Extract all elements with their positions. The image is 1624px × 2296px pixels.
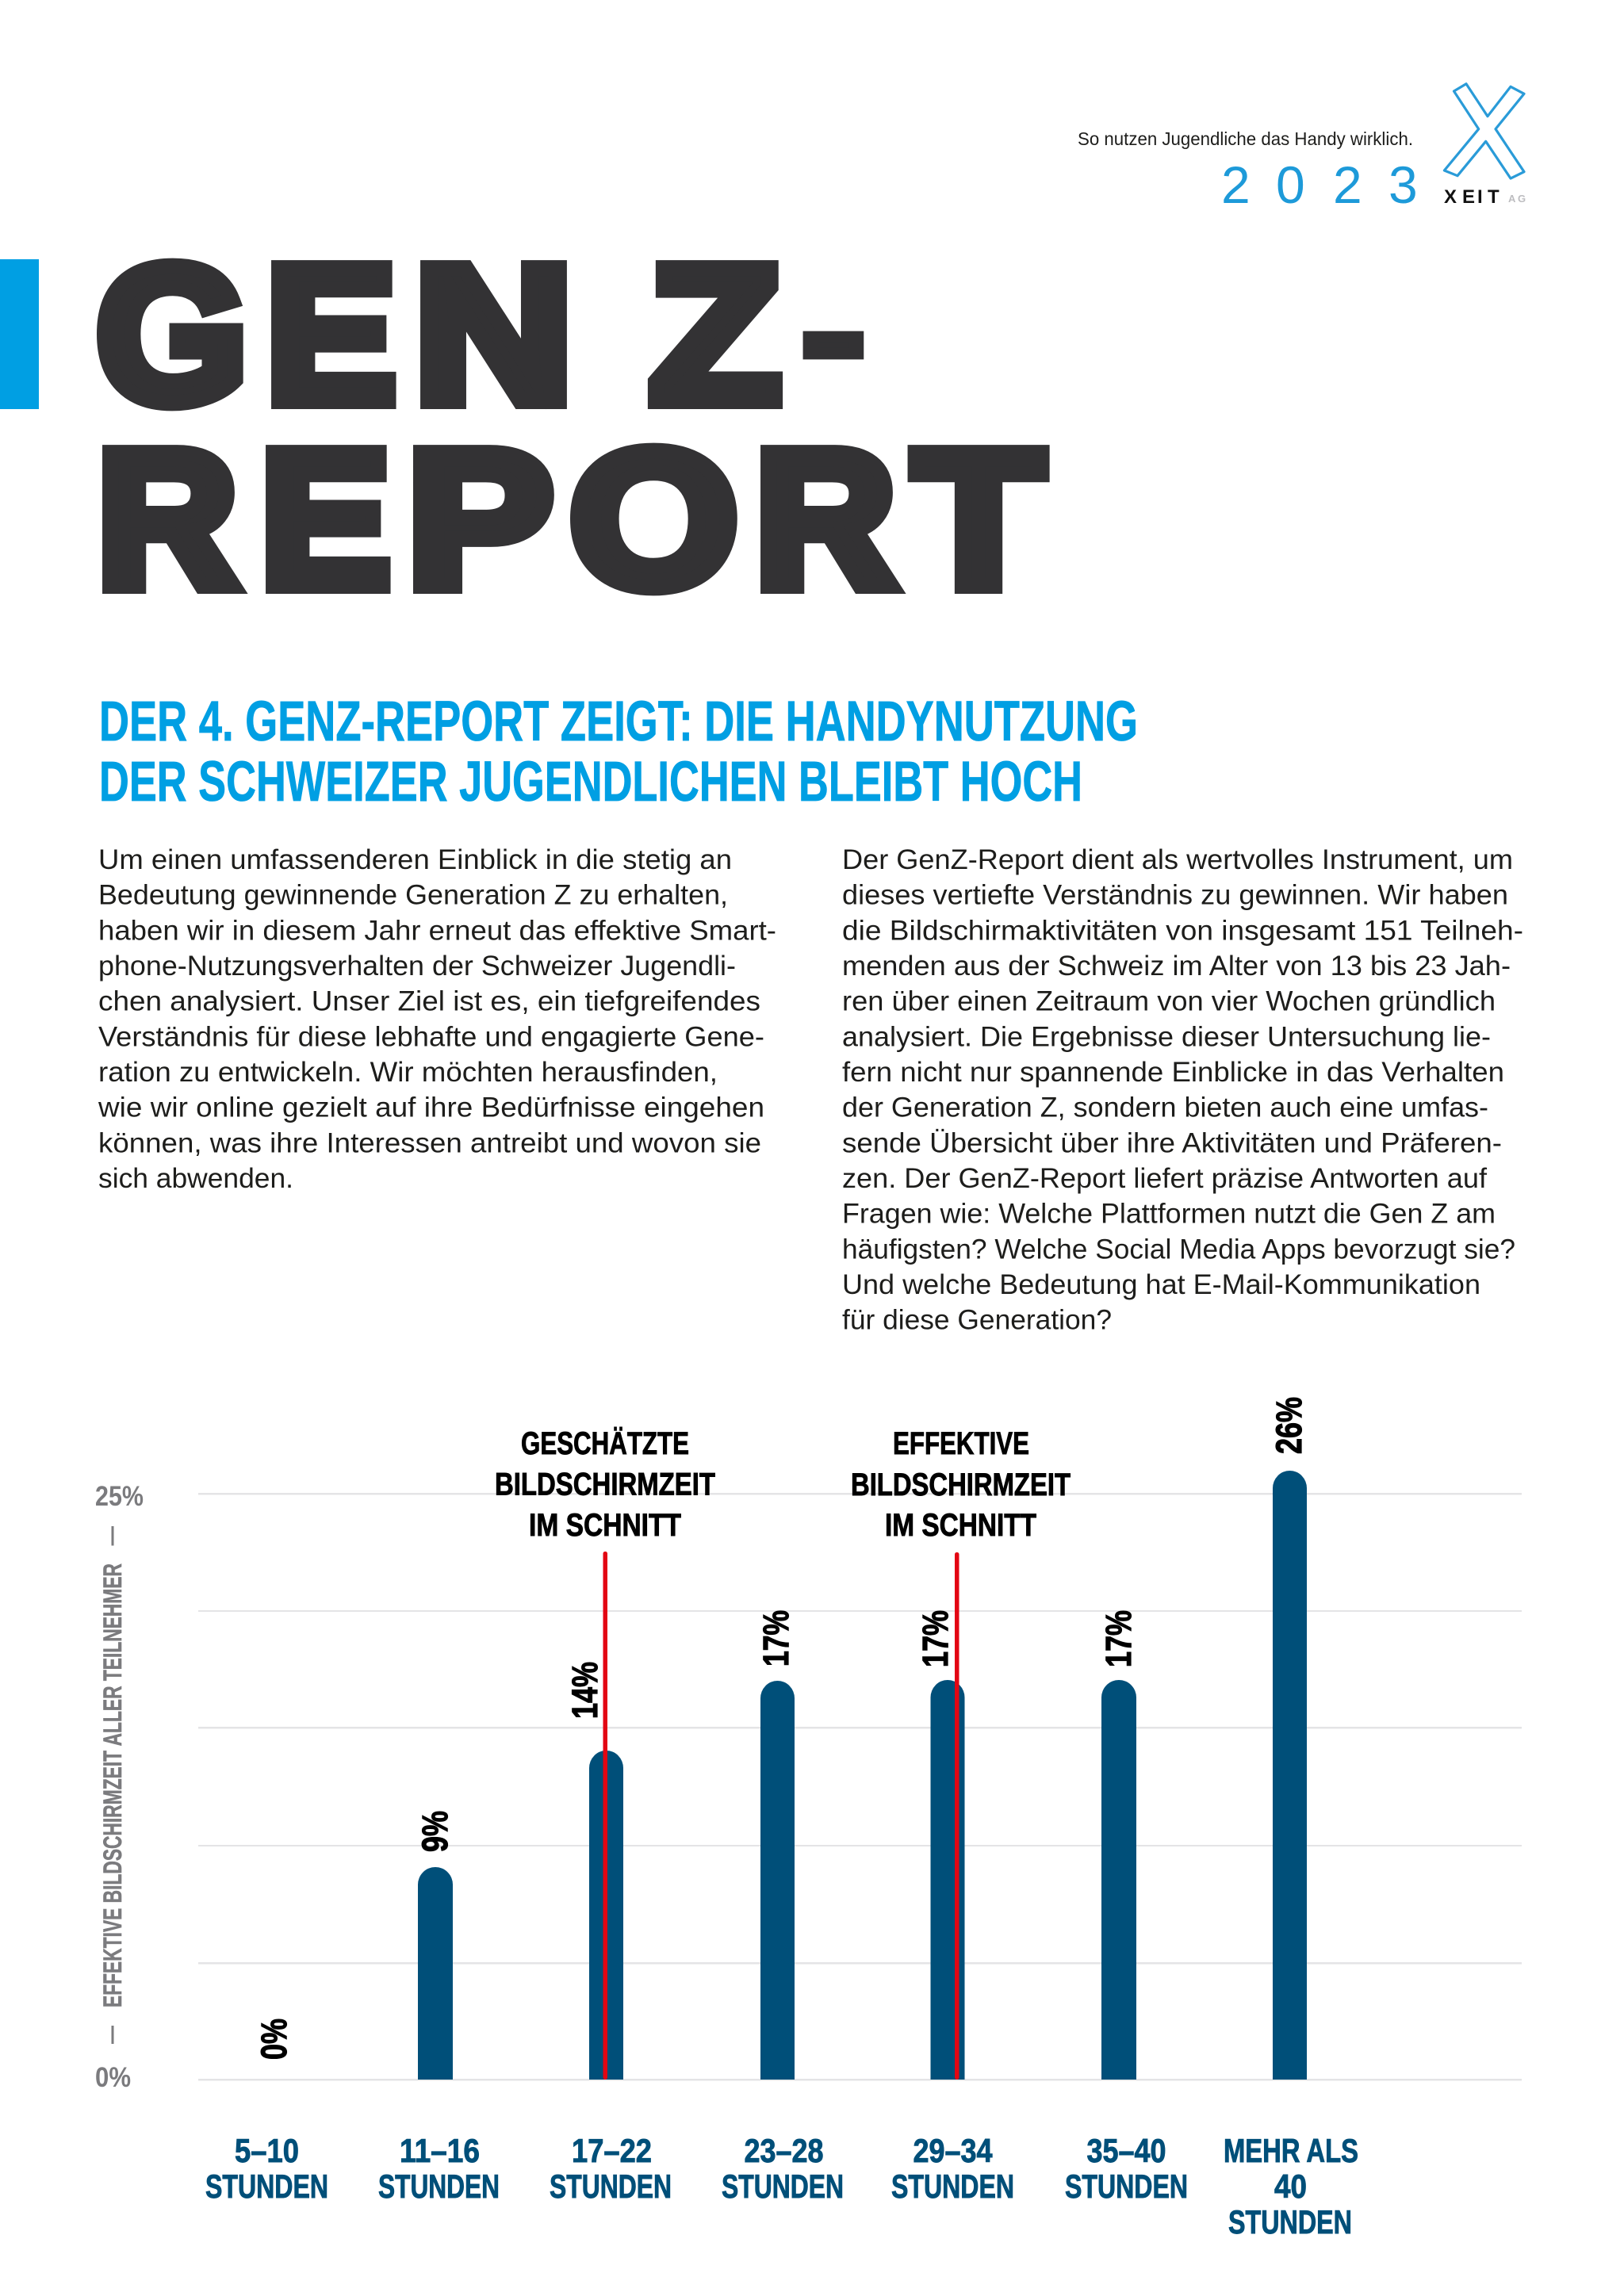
x label: 5–10 Stunden — [205, 2132, 328, 2205]
main title — [97, 226, 1044, 628]
value 0%: 0% — [254, 2019, 294, 2060]
body text: right column: der Generation Z, sondern bieten auch eine umfas- — [842, 1093, 1488, 1123]
main title: G — [97, 226, 247, 442]
body text: left column: ration zu entwickeln. Wir möchten herausfinden, — [98, 1057, 718, 1088]
bar chart: effective screen time — [95, 1397, 1522, 2241]
x label: 5–10 Stunden: 5–10 — [235, 2132, 299, 2169]
main title: R — [756, 411, 895, 627]
bar: 11–16 Stunden — [418, 1867, 453, 2080]
x label: 11–16 Stunden — [378, 2132, 500, 2205]
x label: 23–28 Stunden: 23–28 — [744, 2132, 823, 2169]
callout: estimated screen time — [495, 1426, 715, 1543]
body text: left column: haben wir in diesem Jahr erneut das effektive Smart- — [98, 915, 776, 946]
body text: left column: Bedeutung gewinnende Generation Z zu erhalten, — [98, 880, 728, 911]
body text: left column: können, was ihre Interessen antreibt und wovon sie — [98, 1127, 761, 1158]
x label: 35–40 Stunden: STUNDEN — [1065, 2168, 1188, 2205]
callout: estimated screen time: IM SCHNITT — [529, 1508, 681, 1543]
x label: 23–28 Stunden — [722, 2132, 844, 2205]
value 9%: 9% — [415, 1811, 455, 1852]
body text: left column: sich abwenden. — [98, 1163, 293, 1194]
value 17% (23–28): 17% — [756, 1610, 796, 1667]
x label: mehr als 40 Stunden: 40 — [1274, 2168, 1307, 2205]
callout: estimated screen time: BILDSCHIRMZEIT — [495, 1467, 715, 1502]
x label: 5–10 Stunden: STUNDEN — [205, 2168, 328, 2205]
subheading — [99, 691, 1138, 813]
main title: P — [408, 411, 553, 628]
value 14%: 14% — [565, 1662, 605, 1719]
y axis tick bottom — [111, 2026, 114, 2044]
callout: effective screen time: BILDSCHIRMZEIT — [851, 1468, 1071, 1502]
icon: XEIT X logo mark — [1444, 84, 1524, 178]
x label: mehr als 40 Stunden — [1224, 2132, 1358, 2241]
main title: Z — [650, 227, 780, 442]
x label: mehr als 40 Stunden: MEHR ALS — [1224, 2132, 1358, 2169]
body text: left column — [98, 844, 776, 1194]
body text: left column: chen analysiert. Unser Ziel ist es, ein tiefgreifendes — [98, 986, 760, 1017]
x label: 17–22 Stunden: 17–22 — [572, 2132, 652, 2169]
body text: right column: die Bildschirmaktivitäten von insgesamt 151 Teilneh- — [842, 915, 1523, 946]
main title: N — [415, 227, 573, 442]
x label: 29–34 Stunden: STUNDEN — [891, 2168, 1014, 2205]
marker: estimated average — [603, 1552, 607, 2080]
tagline: So nutzen Jugendliche das Handy wirklich. — [1078, 128, 1413, 149]
callout: effective screen time: IM SCHNITT — [885, 1508, 1036, 1543]
body text: right column: für diese Generation? — [842, 1305, 1112, 1336]
x label: 11–16 Stunden: 11–16 — [400, 2132, 480, 2169]
body text: right column: analysiert. Die Ergebnisse dieser Untersuchung lie- — [842, 1021, 1491, 1052]
x label: 35–40 Stunden: 35–40 — [1086, 2132, 1166, 2169]
body text: left column: Verständnis für diese lebhafte und engagierte Gene- — [98, 1021, 764, 1052]
bar: mehr als 40 Stunden — [1273, 1471, 1307, 2080]
main title: E — [261, 411, 390, 627]
marker: effective average — [955, 1552, 959, 2080]
body text: right column: Und welche Bedeutung hat E-Mail-Kommunikation — [842, 1269, 1480, 1300]
x label: mehr als 40 Stunden: STUNDEN — [1228, 2203, 1352, 2241]
y axis bottom value: 0% — [95, 2062, 131, 2093]
subheading: DER 4. GENZ-REPORT ZEIGT: DIE HANDYNUTZUNG — [99, 691, 1138, 753]
bar: 17–22 Stunden — [589, 1751, 623, 2080]
x label: 23–28 Stunden: STUNDEN — [722, 2168, 844, 2205]
value 17% (35–40): 17% — [1098, 1610, 1139, 1667]
header: tagline, year and logo — [1078, 84, 1526, 214]
y axis top value: 25% — [95, 1481, 144, 1512]
value 17% (29–34): 17% — [915, 1610, 956, 1667]
y axis tick top — [111, 1526, 114, 1546]
bar: 35–40 Stunden — [1101, 1680, 1136, 2080]
logo wordmark: XEIT — [1444, 186, 1500, 208]
value 26%: 26% — [1269, 1397, 1309, 1454]
main title: O — [570, 411, 737, 627]
body text: right column: menden aus der Schweiz im Alter von 13 bis 23 Jah- — [842, 951, 1511, 982]
x label: 11–16 Stunden: STUNDEN — [378, 2168, 500, 2205]
body text: right column — [842, 844, 1523, 1336]
x label: 35–40 Stunden — [1065, 2132, 1188, 2205]
body text: right column: fern nicht nur spannende Einblicke in das Verhalten — [842, 1057, 1504, 1088]
main title: E — [266, 226, 396, 442]
bar: 23–28 Stunden — [760, 1681, 795, 2080]
year: 2023 — [1221, 155, 1418, 214]
y axis title: EFFEKTIVE BILDSCHIRMZEIT ALLER TEILNEHMER — [98, 1563, 127, 2007]
logo suffix: AG — [1508, 193, 1526, 205]
callout: effective screen time: EFFEKTIVE — [893, 1426, 1029, 1461]
subheading: DER SCHWEIZER JUGENDLICHEN BLEIBT HOCH — [99, 751, 1082, 813]
main title: - — [803, 255, 864, 412]
bar: 29–34 Stunden — [931, 1680, 964, 2080]
callout: effective screen time — [851, 1426, 1071, 1543]
main title: T — [914, 412, 1044, 627]
x label: 29–34 Stunden — [891, 2132, 1014, 2205]
body text: right column: ren über einen Zeitraum von vier Wochen gründlich — [842, 986, 1496, 1017]
body text: right column: zen. Der GenZ-Report liefert präzise Antworten auf — [842, 1163, 1487, 1194]
body text: left column: wie wir online gezielt auf ihre Bedürfnisse eingehen — [98, 1093, 764, 1123]
body text: left column: phone-Nutzungsverhalten der Schweizer Jugendli- — [98, 951, 736, 982]
body text: left column: Um einen umfassenderen Einblick in die stetig an — [98, 844, 732, 875]
body text: right column: dieses vertiefte Verständnis zu gewinnen. Wir haben — [842, 880, 1508, 911]
body text: right column: Fragen wie: Welche Plattformen nutzt die Gen Z am — [842, 1199, 1496, 1230]
callout: estimated screen time: GESCHÄTZTE — [521, 1426, 689, 1461]
body text: right column: häufigsten? Welche Social Media Apps bevorzugt sie? — [842, 1234, 1515, 1265]
blue accent bar — [0, 259, 39, 409]
x label: 17–22 Stunden — [550, 2132, 672, 2205]
x label: 17–22 Stunden: STUNDEN — [550, 2168, 672, 2205]
body text: right column: Der GenZ-Report dient als wertvolles Instrument, um — [842, 844, 1513, 875]
body text: right column: sende Übersicht über ihre Aktivitäten und Präferen- — [842, 1127, 1502, 1158]
x label: 29–34 Stunden: 29–34 — [914, 2132, 993, 2169]
main title: R — [98, 411, 237, 627]
